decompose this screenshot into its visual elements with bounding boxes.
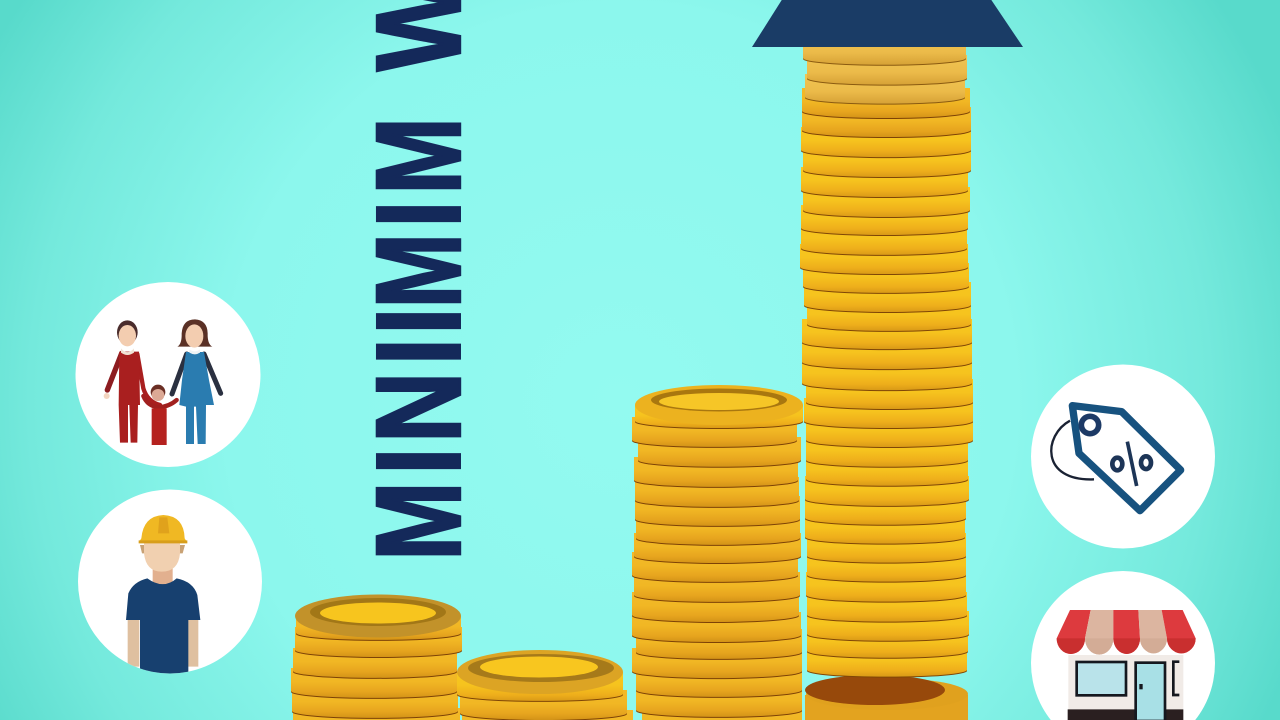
- ears: [140, 545, 185, 553]
- shirt: [126, 578, 200, 675]
- icon: price tag: [1031, 364, 1215, 548]
- tag: [1072, 406, 1181, 511]
- door: [1136, 663, 1165, 720]
- hole: [1081, 416, 1099, 434]
- icon: worker: [78, 490, 262, 675]
- father: [104, 320, 160, 443]
- vertical title: M: [351, 233, 486, 308]
- smallest coin stack: [457, 650, 633, 720]
- vertical title: M: [351, 117, 486, 195]
- vertical title: I: [350, 336, 487, 367]
- base: [1068, 709, 1183, 720]
- tall coin stack: [800, 35, 973, 720]
- icon: shop: [1031, 571, 1215, 720]
- vertical title: I: [350, 199, 487, 229]
- middle coin stack: [632, 385, 803, 720]
- vertical title: N: [352, 372, 486, 443]
- arms: [128, 617, 198, 667]
- mother: [172, 319, 221, 444]
- helmet: [139, 515, 187, 543]
- arrow head: [752, 0, 1023, 47]
- child: [143, 385, 177, 445]
- vertical title: [350, 0, 487, 561]
- face: [144, 542, 180, 572]
- vertical title: I: [350, 446, 487, 476]
- vertical title: M: [352, 481, 487, 561]
- door handle: [1139, 684, 1143, 689]
- string: [1051, 421, 1094, 479]
- window: [1077, 662, 1126, 695]
- icon: family: [76, 282, 260, 467]
- percent sign: [1112, 442, 1151, 486]
- small coin stack: [291, 594, 462, 720]
- vertical title: I: [350, 306, 487, 336]
- awning: [1057, 610, 1196, 655]
- side window: [1173, 662, 1179, 695]
- neck: [152, 568, 173, 584]
- building: [1068, 655, 1183, 720]
